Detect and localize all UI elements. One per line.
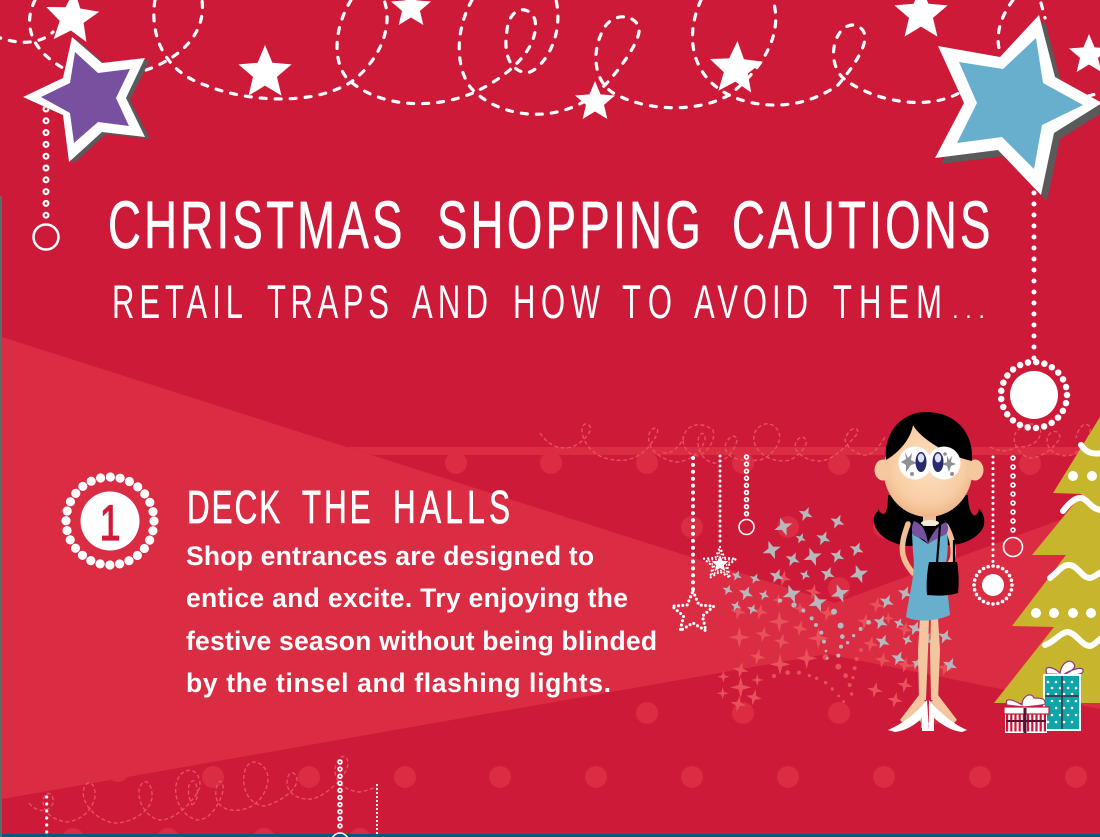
section heading: DECK	[187, 482, 280, 534]
hanging ring	[739, 457, 754, 534]
section body text: festive season without being blinded	[186, 626, 657, 656]
back hair	[874, 495, 984, 546]
background dots	[62, 452, 1087, 837]
purple star	[23, 37, 150, 164]
section body text	[186, 541, 657, 698]
coral dots	[772, 648, 863, 703]
section heading	[187, 482, 510, 534]
ring at the bottom edge	[332, 833, 348, 837]
neck	[923, 512, 936, 526]
head	[884, 423, 972, 517]
christmas tree	[994, 417, 1100, 703]
faint garland: middle	[540, 424, 1090, 463]
number badge	[66, 477, 154, 565]
coral sparkles	[717, 569, 954, 713]
ears	[874, 460, 892, 480]
hanging dotted star large	[672, 458, 714, 631]
subtitle	[112, 277, 985, 329]
hanging dotted star small	[704, 456, 736, 578]
number badge: 1	[100, 496, 120, 551]
gift: teal box	[1043, 661, 1083, 731]
top garland	[0, 0, 1100, 114]
small loop on bottom garland	[188, 781, 198, 805]
section heading: HALLS	[393, 482, 510, 534]
lower left hanging strings	[47, 762, 377, 837]
hanging ornament small	[974, 457, 1012, 604]
grey sparkles	[720, 504, 960, 732]
white stars	[43, 0, 1100, 119]
horizontal band	[347, 447, 1100, 455]
arms	[902, 524, 953, 573]
front hair	[886, 412, 972, 461]
right string with large ornament	[1001, 193, 1067, 428]
sparkle burst	[717, 504, 960, 732]
subtitle: HOW	[513, 277, 600, 329]
dress	[906, 532, 950, 621]
left edge strip	[0, 196, 2, 837]
subtitle: THEM	[833, 277, 942, 329]
subtitle: AVOID	[694, 277, 808, 329]
title	[108, 188, 990, 263]
gift: red box	[1004, 695, 1049, 733]
handbag	[927, 525, 959, 596]
character: girl	[874, 412, 984, 732]
collar	[912, 521, 948, 544]
subtitle: RETAIL	[112, 277, 243, 329]
grey dots	[778, 599, 871, 660]
shoes	[888, 700, 967, 732]
subtitle: AND	[412, 277, 488, 329]
hanging ring right	[1004, 458, 1022, 556]
subtitle: TRAPS	[267, 277, 389, 329]
section heading: THE	[302, 482, 371, 534]
subtitle: ...	[952, 297, 985, 324]
necklace	[921, 520, 939, 526]
blue star	[935, 15, 1100, 201]
section body text: by the tinsel and flashing lights.	[186, 668, 611, 698]
title: SHOPPING	[437, 188, 701, 263]
bottom blue strip	[2, 834, 1100, 837]
subtitle: TO	[622, 277, 672, 329]
tree decorations	[1045, 445, 1100, 646]
title: CAUTIONS	[732, 188, 990, 263]
eyes	[898, 446, 960, 480]
faint garland: bottom	[29, 756, 377, 823]
spotlight beams	[2, 337, 1100, 799]
section body text: entice and excite. Try enjoying the	[186, 583, 628, 613]
left string with ring ornament	[34, 109, 58, 250]
title: CHRISTMAS	[108, 188, 402, 263]
section body text: Shop entrances are designed to	[186, 541, 594, 571]
legs	[900, 618, 957, 725]
